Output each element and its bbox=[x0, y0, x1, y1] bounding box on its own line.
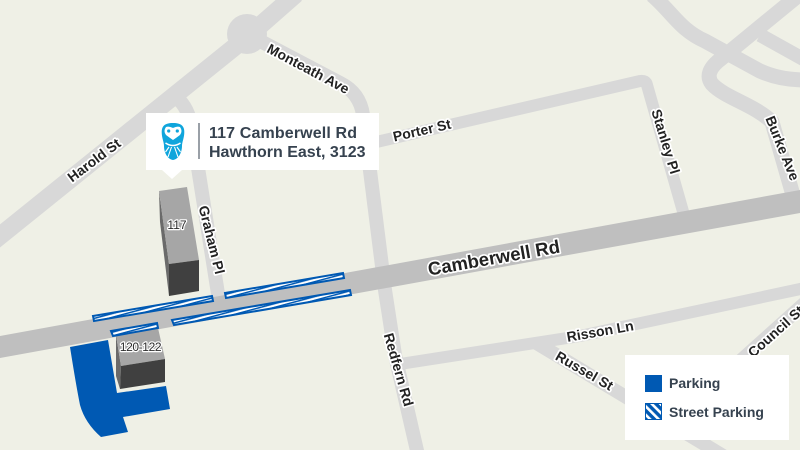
label: Harold St: Harold St bbox=[64, 135, 124, 185]
road: northeast branch bbox=[760, 35, 800, 60]
road: northeast curve bbox=[652, 0, 800, 80]
strip: south west bbox=[111, 323, 158, 336]
street parking strips bbox=[93, 273, 351, 336]
label: Stanley Pl: Stanley Pl bbox=[648, 107, 683, 176]
road: Camberwell Rd bbox=[0, 190, 800, 358]
road: Council St bbox=[735, 303, 800, 366]
road: Porter St and Stanley Pl bbox=[372, 81, 684, 215]
strip: south east bbox=[172, 290, 351, 325]
address line 1: 117 Camberwell Rd bbox=[209, 125, 357, 142]
divider bbox=[198, 123, 200, 159]
label: Monteath Ave: Monteath Ave bbox=[265, 40, 352, 97]
road: Harold St bbox=[0, 0, 296, 244]
label: Porter St: Porter St bbox=[391, 116, 453, 145]
road: Russel St bbox=[528, 343, 735, 450]
building label: 120-122: 120-122 bbox=[120, 340, 162, 354]
road: Graham Pl bbox=[177, 98, 219, 300]
building 120-122 bbox=[116, 328, 165, 389]
icon: owl logo bbox=[162, 123, 184, 160]
legend swatch: street parking bbox=[646, 404, 662, 420]
label: Graham Pl: Graham Pl bbox=[196, 204, 228, 276]
label: Redfern Rd: Redfern Rd bbox=[381, 331, 417, 408]
building label: 117: 117 bbox=[167, 218, 187, 232]
legend text: street parking: Street Parking bbox=[669, 404, 764, 420]
road: Monteath Ave and Redfern Rd bbox=[247, 34, 418, 450]
road: roundabout bbox=[227, 14, 267, 54]
strip: north west bbox=[93, 296, 213, 321]
address text bbox=[209, 125, 366, 161]
address callout bbox=[146, 113, 379, 179]
road: Burke Ave bbox=[709, 0, 800, 195]
label: Russel St: Russel St bbox=[553, 348, 616, 394]
building 117 bbox=[159, 187, 199, 296]
legend text: parking: Parking bbox=[669, 375, 720, 391]
parking lot bbox=[70, 340, 170, 437]
street labels bbox=[64, 40, 800, 408]
legend bbox=[625, 355, 789, 440]
address line 2: Hawthorn East, 3123 bbox=[209, 144, 366, 161]
label: Risson Ln: Risson Ln bbox=[565, 317, 635, 345]
legend swatch: parking bbox=[645, 375, 662, 392]
road: Risson Ln bbox=[400, 288, 800, 364]
label: Camberwell Rd: Camberwell Rd bbox=[426, 236, 562, 280]
strip: north east bbox=[225, 273, 344, 298]
